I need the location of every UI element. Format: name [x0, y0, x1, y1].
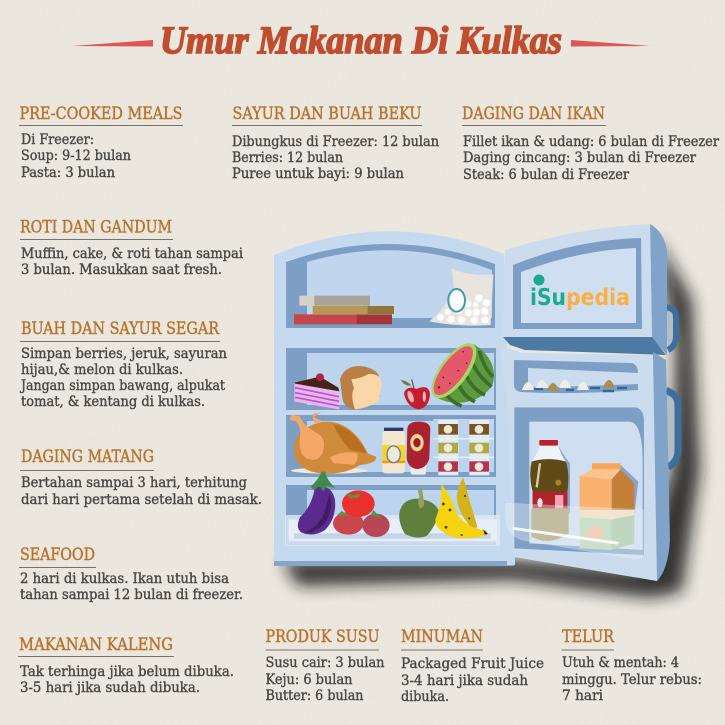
door tray [506, 503, 643, 559]
panel: telur: Utuh & mentah: 4 [562, 655, 679, 671]
panel: daging matang [20, 447, 262, 508]
apple [401, 379, 430, 409]
panel: roti dan gandum [20, 218, 244, 278]
panel: roti dan gandum: ROTI DAN GANDUM [20, 218, 172, 236]
panel: sayur dan buah beku: SAYUR DAN BUAH BEKU [232, 104, 422, 123]
eggs [522, 380, 615, 391]
panel: pre-cooked meals: Soup: 9-12 bulan [21, 148, 131, 164]
ketchup bottle [407, 422, 430, 475]
panel: buah dan sayur segar: Jangan simpan bawang, alpukat [19, 378, 225, 394]
food: cake, bread, apple, watermelon [294, 336, 494, 410]
juice carton [580, 463, 638, 550]
watermelon [423, 336, 494, 406]
fridge shelves [286, 348, 515, 565]
panel: daging dan ikan: DAGING DAN IKAN [462, 104, 605, 123]
panel: makanan kaleng: MAKANAN KALENG [19, 635, 173, 654]
panel: minuman [401, 627, 544, 705]
panel: sayur dan buah beku: Berries: 12 bulan [232, 150, 343, 166]
panel: pre-cooked meals [19, 104, 183, 181]
panel: produk susu [266, 627, 385, 704]
panel: buah dan sayur segar [19, 319, 227, 410]
panel: minuman: Packaged Fruit Juice [401, 656, 544, 672]
freezer compartment [286, 244, 495, 328]
title [72, 19, 650, 62]
panel: telur: TELUR [562, 627, 615, 646]
lower door compartment [506, 407, 644, 559]
panel: produk susu: Susu cair: 3 bulan [266, 655, 385, 671]
panel: pre-cooked meals: Di Freezer: [21, 132, 94, 148]
logo: iSupedia: iSu [530, 285, 566, 311]
panel: buah dan sayur segar: BUAH DAN SAYUR SEGAR [21, 319, 219, 338]
panel: daging dan ikan: Daging cincang: 3 bulan di Freezer [463, 150, 696, 166]
freezer door side [650, 224, 667, 355]
bananas [435, 477, 488, 539]
fridge illustration [274, 224, 700, 598]
panel: roti dan gandum: Muffin, cake, & roti tahan sampai [21, 246, 244, 262]
panel: seafood: 2 hari di kulkas. Ikan utuh bisa [20, 571, 229, 587]
door face [500, 345, 657, 581]
panel: sayur dan buah beku: Dibungkus di Freezer: 12 bulan [232, 134, 439, 150]
panel: minuman: MINUMAN [401, 627, 483, 646]
panel: makanan kaleng: 3-5 hari jika sudah dibuka. [20, 680, 200, 696]
panel: buah dan sayur segar: tomat, & kentang di kulkas. [21, 394, 205, 410]
bottle [530, 440, 570, 541]
bell pepper [399, 489, 439, 538]
panel: telur: minggu. Telur rebus: [562, 672, 702, 688]
panel: daging dan ikan [462, 104, 719, 183]
logo: iSupedia: pedia [566, 285, 630, 311]
panel: minuman: 3-4 hari jika sudah [401, 673, 528, 689]
door handles [666, 307, 678, 467]
panel: pre-cooked meals: Pasta: 3 bulan [21, 165, 115, 181]
panel: daging matang: Bertahan sampai 3 hari, terhitung [21, 475, 247, 491]
fridge shadow [282, 235, 700, 598]
panel: produk susu: PRODUK SUSU [266, 627, 380, 646]
yogurt cups [433, 420, 494, 475]
cake [294, 373, 339, 409]
egg shelf [514, 360, 638, 393]
panel: seafood: tahan sampai 12 bulan di freezer. [20, 587, 243, 603]
crisper drawer back [285, 515, 500, 546]
panel: buah dan sayur segar: Simpan berries, jeruk, sayuran [21, 346, 227, 362]
panel: makanan kaleng: Tak terhinga jika belum dibuka. [20, 664, 234, 680]
bread [340, 366, 382, 410]
title rule: left [72, 40, 153, 46]
food: middle shelf and crisper [285, 413, 500, 546]
refrigerator door [500, 345, 670, 581]
freezer door frame [513, 238, 642, 329]
mayonnaise jar [382, 428, 405, 473]
eggplant [298, 472, 335, 534]
panel: pre-cooked meals: PRE-COOKED MEALS [20, 104, 182, 123]
tomatoes [333, 490, 390, 537]
panel: telur [562, 627, 702, 704]
panel: produk susu: Keju: 6 bulan [266, 672, 353, 688]
panel: daging matang: dari hari pertama setelah di masak. [21, 492, 262, 508]
fridge body [274, 231, 514, 563]
freezer door underside [503, 337, 666, 355]
panel: daging matang: DAGING MATANG [21, 447, 154, 466]
panel: sayur dan buah beku [232, 104, 439, 182]
freezer door panel [521, 248, 636, 323]
door side [653, 352, 670, 581]
panel: seafood [19, 545, 243, 603]
panel: roti dan gandum: 3 bulan. Masukkan saat fresh. [21, 262, 222, 278]
panel: daging dan ikan: Steak: 6 bulan di Freezer [463, 167, 629, 183]
logo head icon [534, 274, 544, 286]
panel: produk susu: Butter: 6 bulan [266, 688, 364, 704]
logo: iSupedia [530, 274, 630, 311]
frozen bag [429, 268, 493, 326]
freezer door face [503, 224, 652, 338]
panel: sayur dan buah beku: Puree untuk bayi: 9 bulan [232, 166, 404, 182]
panel: seafood: SEAFOOD [20, 545, 95, 564]
panel: buah dan sayur segar: hijau,& melon di kulkas. [21, 362, 183, 378]
panel: minuman: dibuka. [401, 689, 449, 705]
freezer door [503, 224, 667, 355]
panel: makanan kaleng [18, 635, 234, 696]
roast chicken [289, 413, 376, 474]
title rule: right [571, 40, 650, 46]
title text: Umur Makanan Di Kulkas [160, 19, 562, 62]
panel: telur: 7 hari [562, 688, 604, 704]
frozen boxes [294, 296, 394, 324]
